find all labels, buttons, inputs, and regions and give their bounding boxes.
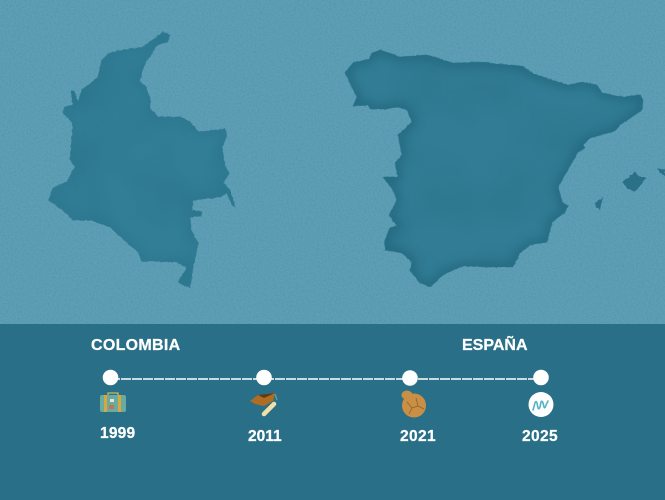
label: 1999: 1999 bbox=[100, 425, 135, 442]
icon: wave logo bbox=[528, 392, 554, 417]
heading: Colombia: COLOMBIA bbox=[91, 337, 181, 354]
label: 2021: 2021 bbox=[400, 428, 436, 445]
marker 1999 bbox=[103, 370, 118, 385]
panel: timeline band bbox=[0, 324, 665, 500]
map: Colombia bbox=[49, 32, 235, 288]
map: España bbox=[345, 50, 665, 287]
icon: graduation cap and diploma bbox=[250, 393, 277, 414]
map shading bbox=[70, 33, 643, 288]
marker 2025 bbox=[533, 370, 549, 385]
icon: brain-shaped map bbox=[402, 390, 426, 418]
marker 2011 bbox=[256, 370, 272, 385]
icon: suitcase bbox=[100, 393, 126, 412]
marker 2021 bbox=[402, 370, 418, 386]
paper texture bbox=[0, 0, 665, 324]
panel: textured map area bbox=[0, 0, 665, 324]
heading: España: ESPAÑA bbox=[462, 337, 528, 354]
timeline bbox=[100, 370, 554, 418]
label: 2025: 2025 bbox=[522, 428, 558, 445]
label: 2011: 2011 bbox=[248, 428, 282, 445]
background bbox=[0, 0, 665, 324]
